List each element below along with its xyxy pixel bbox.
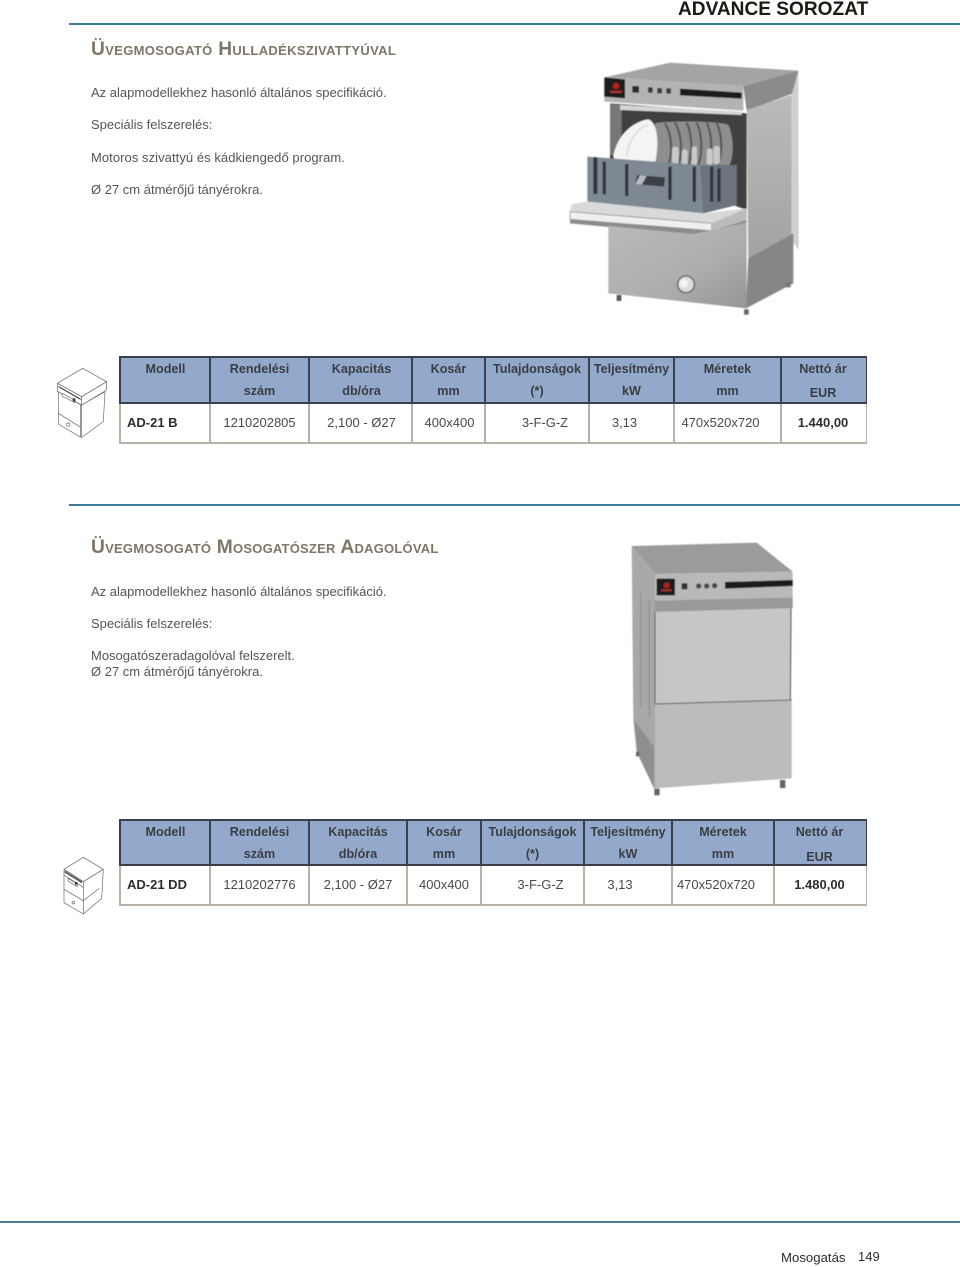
table 1 header row: Modell	[146, 362, 185, 376]
table 1 data row	[119, 404, 867, 444]
table 2 data row: 400x400	[419, 877, 469, 892]
table 2 data row: 1210202776	[223, 877, 296, 892]
table 1 data row: 1210202805	[223, 415, 296, 430]
table 2 header row: Rendelési	[230, 825, 289, 839]
table: AD-21 B	[119, 356, 867, 444]
table 1 data row: 3,13	[612, 415, 637, 430]
table 2 header row: Kosár	[426, 825, 462, 839]
table 1 data row: 2,100 - Ø27	[327, 415, 396, 430]
photo: open dishwasher with rack	[569, 62, 799, 316]
table: AD-21 DD	[119, 819, 867, 906]
table 1 header row: Méretek	[704, 362, 751, 376]
table 1 header row: kW	[622, 384, 641, 398]
table 2 header row: Kapacitás	[328, 825, 388, 839]
table 1 data row: 470x520x720	[681, 415, 760, 430]
table 2 data row: 1.480,00	[794, 877, 845, 892]
table 1 header row: Tulajdonságok	[493, 362, 581, 376]
photo: closed dishwasher	[631, 542, 794, 796]
table 1 data row: 400x400	[425, 415, 474, 430]
table 1 header row: szám	[244, 384, 275, 398]
text: section 1 description: Ø 27 cm átmérőjű tányérokra.	[91, 182, 263, 197]
table 1 header row: Teljesítmény	[594, 362, 669, 376]
table 1 data row: AD-21 B	[127, 415, 178, 430]
footer: section name and page number	[781, 1249, 880, 1265]
table 1 header row	[119, 356, 867, 404]
text: section 2 description: Speciális felszerelés:	[91, 616, 212, 631]
table 1 data row: 3-F-G-Z	[522, 415, 568, 430]
line drawing: machine 1	[57, 368, 107, 438]
table 2 data row: 3-F-G-Z	[517, 877, 564, 892]
text: section 1 description: Motoros szivattyú és kádkiengedő program.	[91, 150, 345, 165]
table 1 data row: 1.440,00	[798, 415, 848, 430]
line drawing: machine 2	[64, 857, 104, 914]
table 1 header row: EUR	[810, 386, 836, 400]
text: section 1 description: Speciális felszerelés:	[91, 117, 212, 132]
table 2 header row: szám	[244, 847, 275, 861]
table 2 header row: mm	[433, 847, 455, 861]
table 2 data row	[119, 866, 867, 906]
table 2 header row: EUR	[806, 850, 833, 864]
heading: section 1: Üvegmosogató Hulladékszivattyúval	[91, 39, 396, 60]
table 2 header row: db/óra	[339, 847, 377, 861]
text: section 2 description: Az alapmodellekhez hasonló általános specifikáció.	[91, 584, 387, 599]
table 2 data row: 470x520x720	[677, 877, 755, 892]
table 2 data row: AD-21 DD	[127, 877, 187, 892]
table 1 header row: Rendelési	[230, 362, 289, 376]
table 2 header row: Tulajdonságok	[489, 825, 576, 839]
text: section 2 description	[91, 584, 387, 679]
table 2 header row: Nettó ár	[796, 825, 843, 839]
table 1 header row: db/óra	[342, 384, 381, 398]
table 2 header row: kW	[619, 847, 637, 861]
text: section 2 description: Mosogatószeradagolóval felszerelt.	[91, 648, 295, 663]
table 1 header row: mm	[716, 384, 739, 398]
footer: section name and page number: 149	[858, 1249, 880, 1264]
table 2 header row: Teljesítmény	[590, 825, 666, 839]
text: section 1 description	[91, 85, 387, 197]
table 1 header row: (*)	[530, 384, 544, 398]
table 2 data row: 2,100 - Ø27	[324, 877, 392, 892]
table 2 header row: Méretek	[699, 825, 747, 839]
table 2 header row: mm	[712, 847, 734, 861]
text: section 2 description: Ø 27 cm átmérőjű tányérokra.	[91, 664, 263, 679]
table 2 header row: (*)	[526, 847, 539, 861]
text: section 1 description: Az alapmodellekhez hasonló általános specifikáció.	[91, 85, 387, 100]
table 2 header row: Modell	[146, 825, 185, 839]
footer: section name and page number: Mosogatás	[781, 1250, 846, 1265]
table 1 header row: mm	[437, 384, 460, 398]
heading: section 2: Üvegmosogató Mosogatószer Adagolóval	[91, 537, 439, 558]
table 1 header row: Kosár	[431, 362, 466, 376]
table 1 header row: Nettó ár	[799, 362, 847, 376]
table 1 header row: Kapacitás	[332, 362, 391, 376]
table 2 header row	[119, 819, 867, 866]
table 2 data row: 3,13	[607, 877, 633, 892]
